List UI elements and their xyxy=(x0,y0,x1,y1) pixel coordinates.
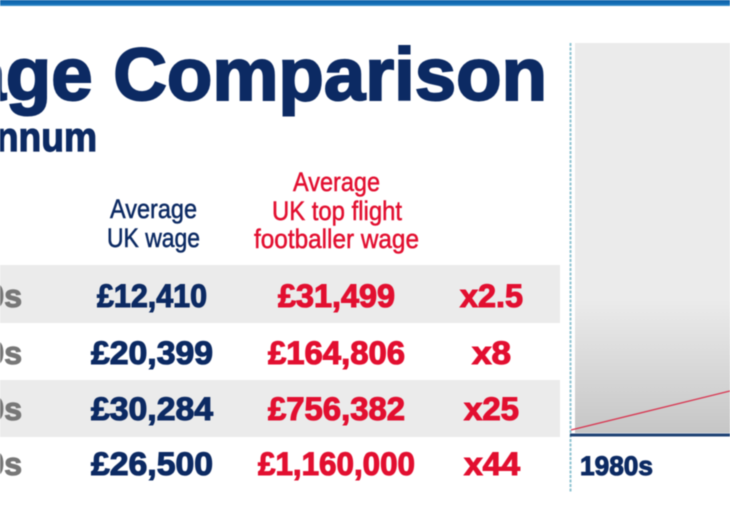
row backgrounds xyxy=(0,265,560,437)
UK wage values: £20,399 xyxy=(91,335,213,371)
top bar xyxy=(0,0,730,6)
line chart xyxy=(570,43,730,492)
footballer wage values xyxy=(258,278,415,482)
multiplier values: x8 xyxy=(472,335,511,371)
column heading: footballer wage xyxy=(254,167,419,254)
footballer wage values: £756,382 xyxy=(268,391,405,427)
footballer wage values: £164,806 xyxy=(268,335,405,371)
UK wage values: £26,500 xyxy=(91,446,213,482)
multiplier values: x2.5 xyxy=(460,278,523,314)
multiplier values: x25 xyxy=(464,391,519,427)
dotted divider xyxy=(570,43,572,492)
x-axis label: 1980s xyxy=(580,451,653,481)
multiplier values: x44 xyxy=(464,446,520,482)
footballer wage values: £1,160,000 xyxy=(258,446,415,482)
column heading: footballer wage: Average xyxy=(293,167,380,197)
column heading: average UK wage xyxy=(107,194,200,253)
column heading: footballer wage: footballer wage xyxy=(254,224,419,254)
UK wage values: £12,410 xyxy=(97,278,207,314)
column heading: footballer wage: UK top flight xyxy=(272,196,402,226)
column heading: average UK wage: UK wage xyxy=(107,223,200,253)
footballer wage values: £31,499 xyxy=(278,278,395,314)
UK wage baseline xyxy=(570,434,730,436)
wage table xyxy=(0,167,560,482)
footballer wage line xyxy=(571,391,730,430)
chart background xyxy=(575,43,730,433)
UK wage values xyxy=(91,278,213,482)
column heading: average UK wage: Average xyxy=(110,194,197,224)
decade labels xyxy=(0,278,22,482)
multiplier values xyxy=(460,278,523,482)
UK wage values: £30,284 xyxy=(91,391,213,427)
